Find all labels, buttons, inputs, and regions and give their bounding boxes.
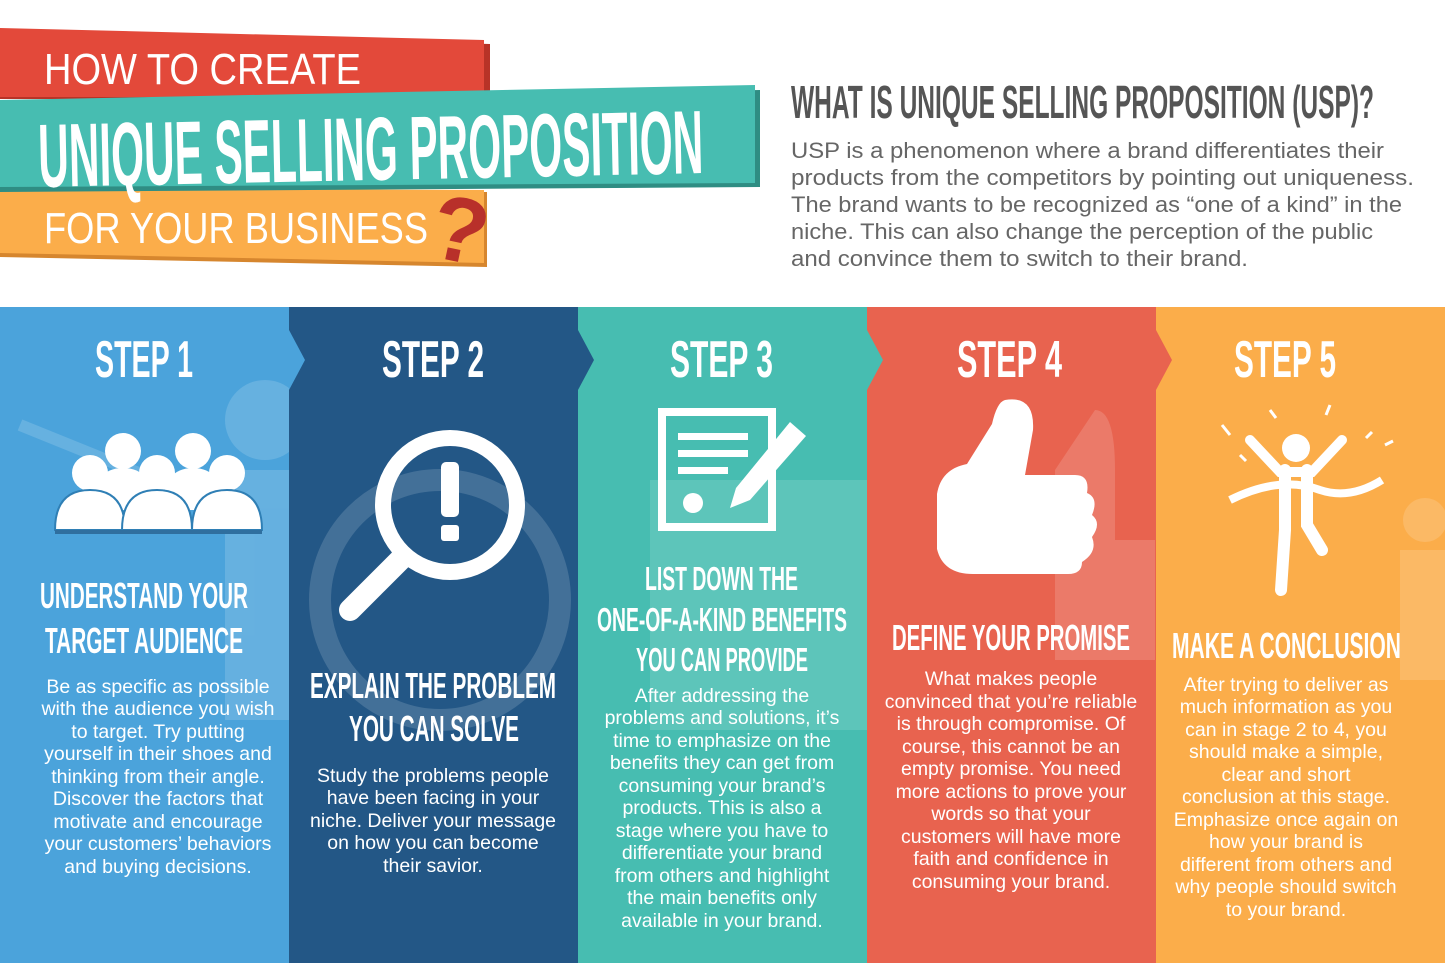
title banner group [0,28,760,286]
USP definition text [791,138,1414,271]
step 3 subheading: LIST DOWN THE [645,560,798,597]
step 2 subheading: EXPLAIN THE PROBLEM [310,665,556,706]
faded background document [650,480,867,730]
icon: question mark: ? [422,175,498,286]
step 4 body text [885,668,1137,893]
step 2 body text: niche. Deliver your message [310,810,556,832]
banner: orange: FOR YOUR BUSINESS [44,204,428,253]
step 1 body text: with the audience you wish [40,698,275,720]
step 4 body text: more actions to prove your [896,781,1127,803]
step 5 body text: can in stage 2 to 4, you [1185,719,1387,741]
step 5 body text: clear and short [1222,764,1351,786]
icon: document with pencil [662,412,806,527]
step 3 body text: available in your brand. [621,910,823,932]
step 3 body text: from others and highlight [615,865,830,887]
panel: step 1 [0,307,305,963]
step 2 subheading [310,665,556,749]
step 2 body text: their savior. [383,855,483,877]
icon: runner at finish line [1222,405,1393,590]
step 4 body text: What makes people [925,668,1097,690]
step 1 subheading: TARGET AUDIENCE [45,620,243,661]
step 5 body text: conclusion at this stage. [1182,786,1390,808]
step 1 heading: STEP 1 [95,331,193,389]
step 2 subheading: YOU CAN SOLVE [349,708,519,749]
step 3 subheading: ONE-OF-A-KIND BENEFITS [597,601,847,638]
panel: step 3 [578,307,868,963]
USP definition text: products from the competitors by pointing out uniqueness. [791,165,1414,190]
banner: red: HOW TO CREATE [44,45,361,94]
step 5 heading: STEP 5 [1234,331,1336,389]
step 3 body text: the main benefits only [627,887,817,909]
step 5 body text: After trying to deliver as [1184,674,1389,696]
step 4 body text: convinced that you’re reliable [885,691,1137,713]
step 5 body text: should make a simple, [1189,741,1383,763]
step 4 body text: customers will have more [901,826,1121,848]
step 3 body text: stage where you have to [616,820,828,842]
faded background magnifier [320,480,560,720]
USP definition text: and convince them to switch to their brand. [791,246,1248,271]
step 3 body text: products. This is also a [622,797,822,819]
panel: step 2 [289,307,579,963]
step 4 body text: is through compromise. Of [897,713,1126,735]
step 4 subheading: DEFINE YOUR PROMISE [892,617,1130,658]
step 1 body text: to target. Try putting [71,721,245,743]
step 1 body text: and buying decisions. [64,856,252,878]
USP definition text: niche. This can also change the perception of the public [791,219,1373,244]
step 4 body text: faith and confidence in [913,848,1109,870]
step 5 body text: how your brand is [1209,831,1363,853]
step 3 subheading: YOU CAN PROVIDE [636,641,808,678]
step 1 subheading: UNDERSTAND YOUR [40,575,248,616]
banner: red [0,28,490,100]
faded background thumb [1055,410,1155,660]
step 3 body text: differentiate your brand [622,842,822,864]
step 1 body text: Be as specific as possible [46,676,270,698]
step 1 body text: thinking from their angle. [51,766,265,788]
step 1 body text [40,676,275,878]
USP definition text: USP is a phenomenon where a brand differentiates their [791,138,1384,163]
step 1 body text: Discover the factors that [53,788,264,810]
USP definition text: The brand wants to be recognized as “one of a kind” in the [791,192,1402,217]
panel: step 4 [867,307,1157,963]
step 1 body text: yourself in their shoes and [44,743,272,765]
step 1 subheading [40,575,248,661]
step 5 body text: Emphasize once again on [1174,809,1398,831]
step 5 body text: to your brand. [1226,899,1346,921]
step 2 body text: have been facing in your [327,787,540,809]
step 4 body text: consuming your brand. [912,871,1110,893]
step 2 body text: Study the problems people [317,765,549,787]
step 1 body text: motivate and encourage [53,811,263,833]
step 5 body text: why people should switch [1174,876,1397,898]
step 4 body text: course, this cannot be an [902,736,1120,758]
step 3 body text: time to emphasize on the [613,730,831,752]
step 1 body text: your customers’ behaviors [45,833,272,855]
step 2 heading: STEP 2 [382,331,484,389]
step 4 body text: words so that your [930,803,1091,825]
icon: magnifier with exclamation [350,438,517,610]
step 3 body text: problems and solutions, it’s [605,707,840,729]
step 4 heading: STEP 4 [957,331,1062,389]
step 3 body text [605,685,840,932]
step 2 body text: on how you can become [327,832,539,854]
step 2 body text [310,765,556,877]
faded background runner [1400,498,1445,680]
icon: thumbs up [937,399,1097,574]
panel: step 5 [1156,307,1445,963]
step 3 body text: benefits they can get from [610,752,834,774]
faded background person [20,380,305,720]
step 3 body text: consuming your brand’s [619,775,826,797]
step 5 body text [1174,674,1398,921]
step 5 body text: different from others and [1180,854,1392,876]
step 4 body text: empty promise. You need [901,758,1121,780]
banner: orange [0,188,487,267]
icon: group of people [55,433,262,534]
banner: teal: UNIQUE SELLING PROPOSITION [37,93,704,207]
step 5 body text: much information as you [1180,696,1392,718]
step 3 subheading [597,560,847,678]
banner: teal [0,85,760,207]
step 3 body text: After addressing the [635,685,809,707]
step 3 heading: STEP 3 [670,331,773,389]
